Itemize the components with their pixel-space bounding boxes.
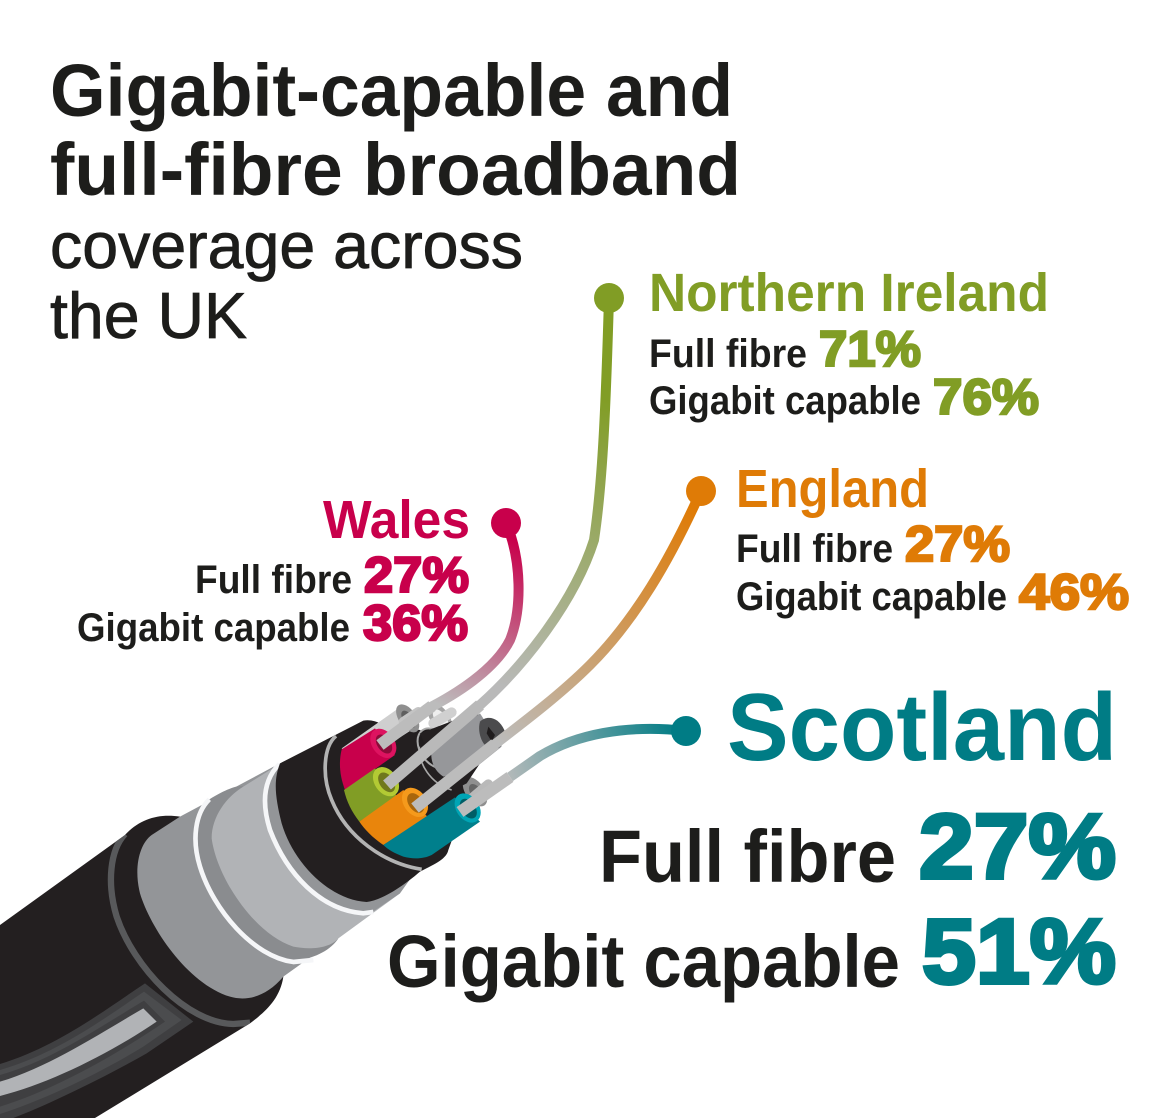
Wales fibre wire and dot [380, 508, 521, 745]
title: coverage across [50, 209, 523, 282]
outer black jacket [0, 816, 283, 1118]
Scotland label: 51% [922, 901, 1116, 1003]
Northern Ireland label: Northern Ireland [649, 263, 1049, 323]
metal sleeve layers [137, 753, 417, 998]
Scotland label: Full fibre [599, 815, 896, 898]
Northern Ireland label [649, 263, 1049, 425]
Wales label: 36% [363, 595, 468, 651]
rear fibre rods [403, 712, 492, 811]
black core end [276, 720, 470, 902]
England fibre wire and dot [415, 476, 716, 808]
England label: 27% [905, 516, 1010, 572]
title [50, 49, 741, 352]
England label: Full fibre [736, 527, 893, 571]
Scotland label [387, 674, 1117, 1003]
green tube [344, 762, 404, 822]
England label: England [736, 459, 929, 519]
inner grey ring [325, 736, 422, 869]
title: Gigabit-capable and [50, 49, 733, 132]
orange tube [359, 783, 433, 845]
Scotland fibre wire and dot [460, 716, 701, 812]
Northern Ireland label: 76% [933, 369, 1039, 425]
Scotland label: 27% [919, 796, 1116, 898]
England label: Gigabit capable [736, 575, 1007, 619]
Wales label: Wales [323, 490, 470, 550]
England label [736, 459, 1129, 620]
title: the UK [50, 279, 247, 352]
central grey strength member [410, 712, 505, 793]
Wales label: 27% [364, 547, 469, 603]
cable head with fibre tubes [276, 699, 505, 902]
title: full-fibre broadband [50, 128, 741, 211]
Northern Ireland label: Gigabit capable [649, 379, 921, 423]
Wales label [77, 490, 470, 651]
Northern Ireland fibre wire and dot [387, 283, 624, 785]
teal tube [383, 788, 486, 858]
crimson tube [340, 724, 402, 790]
cable illustration [0, 699, 505, 1118]
rear light tube [342, 699, 457, 763]
Scotland label: Scotland [727, 674, 1117, 781]
Scotland label: Gigabit capable [387, 920, 900, 1003]
Northern Ireland label: Full fibre [649, 332, 807, 376]
Wales label: Full fibre [195, 558, 352, 602]
Wales label: Gigabit capable [77, 606, 350, 650]
England label: 46% [1019, 564, 1129, 620]
Northern Ireland label: 71% [819, 321, 921, 377]
